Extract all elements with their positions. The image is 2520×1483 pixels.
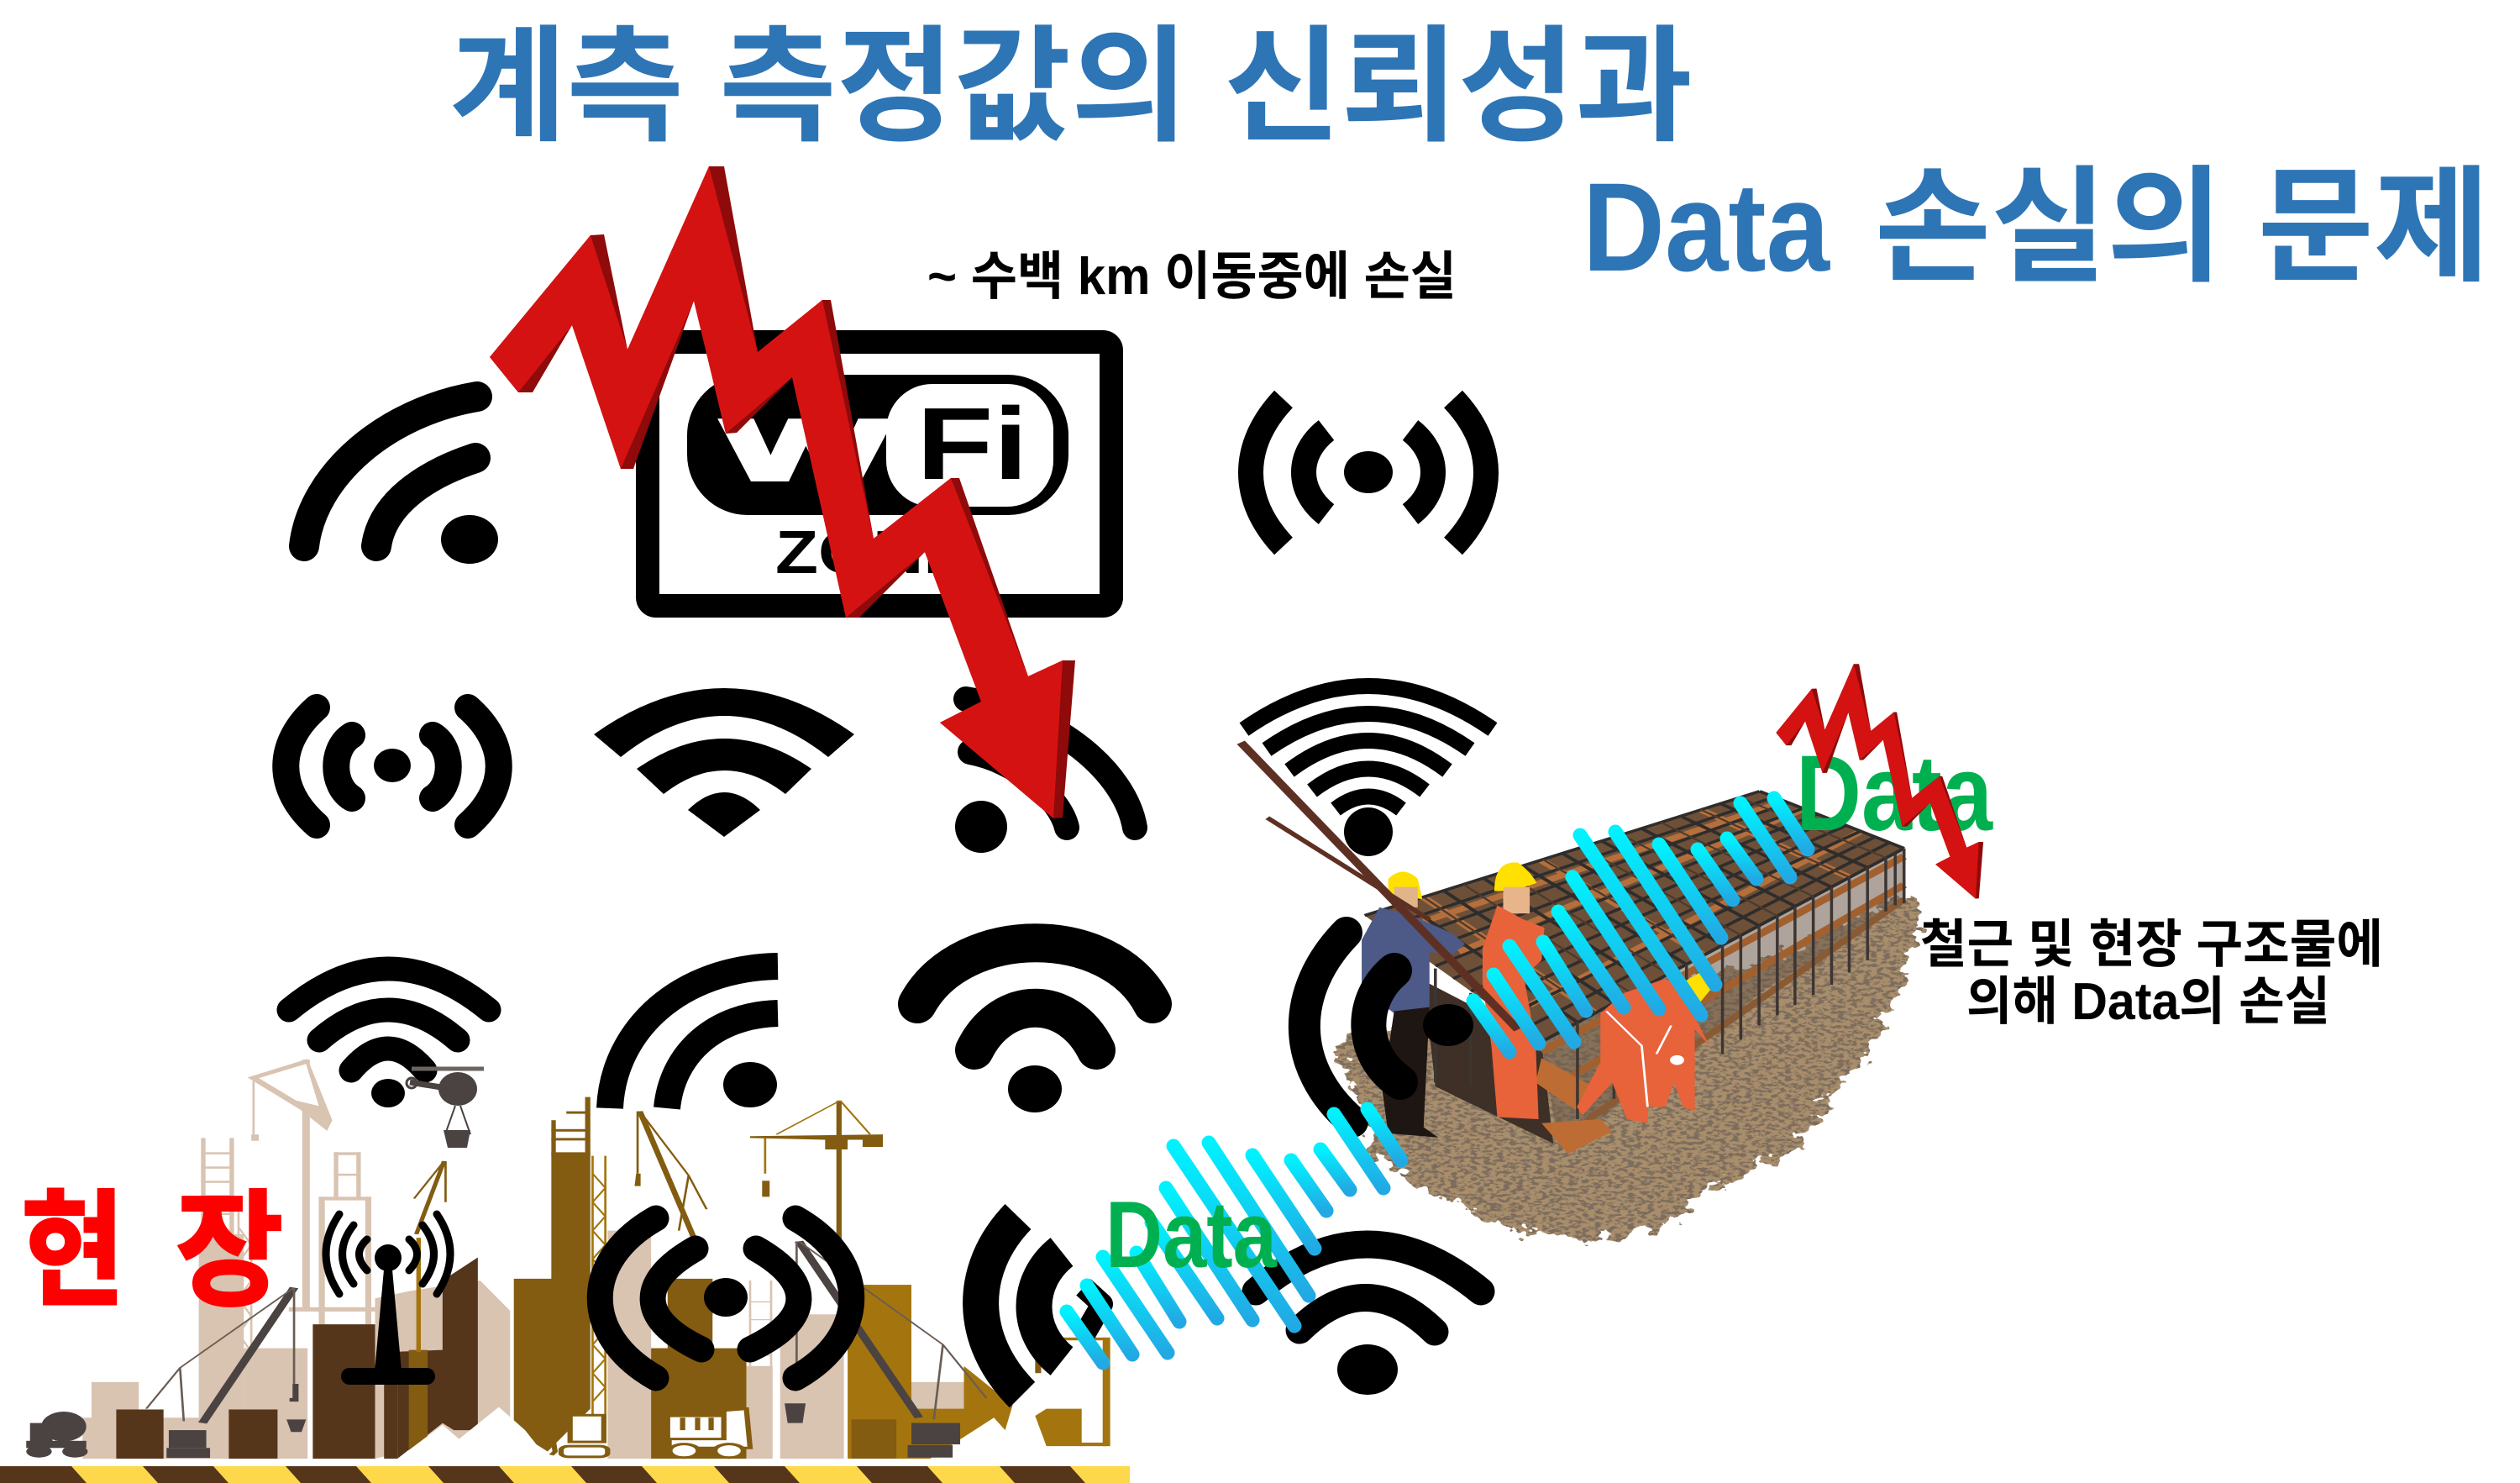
- worker in blue jacket: [1362, 871, 1465, 1138]
- wood poles: [1241, 743, 1518, 1029]
- hazard stripe band: [0, 1466, 1130, 1483]
- icon: broadcast center: [600, 1218, 852, 1378]
- label: field site: [21, 1181, 283, 1323]
- icon: broadcast arcs over site: [1305, 933, 1473, 1122]
- big red zigzag down arrow: [490, 166, 1075, 818]
- construction skyline illustration: [26, 1059, 1110, 1459]
- bulldozer: [551, 1415, 607, 1457]
- icon: wifi quarter row 2: [955, 699, 1135, 853]
- small red zigzag down arrow: [1776, 664, 1983, 899]
- cranes: [146, 1081, 986, 1423]
- icon: wifi quarter top-left: [304, 397, 498, 564]
- icon: broadcast cut left: [981, 1217, 1102, 1395]
- caption: rebar loss line 2: 의해 Data의 손실: [1966, 973, 2330, 1031]
- icon: wifi fan row 2: [594, 688, 854, 837]
- label: Data upper: Data: [1796, 734, 1993, 854]
- icon: broadcast row 2 left: [286, 707, 499, 825]
- rebar cage top: [1365, 791, 1904, 1042]
- rebar cage side layers: [1424, 849, 1904, 1154]
- mixer truck: [26, 1412, 87, 1458]
- label: Data lower: Data: [1105, 1182, 1278, 1287]
- title line 2: [1583, 156, 2490, 297]
- icon: wifi arcs row 3 left: [289, 969, 489, 1107]
- title line 2: 손실의 문제: [1875, 156, 2490, 297]
- white cutout in light crane: [259, 1064, 319, 1106]
- icon: wifi zone sign: W: [724, 403, 889, 497]
- label: field site: 현: [21, 1181, 125, 1323]
- caption: rebar loss line 1: 철근 및 현장 구조물에: [1920, 916, 2383, 974]
- icon: antenna tower: [326, 1214, 450, 1385]
- icon: broadcast top-right: [1251, 399, 1486, 546]
- worker in orange suit: [1483, 862, 1545, 1119]
- caption: loss during travel: ~ 수백 km 이동중에 손실: [927, 248, 1457, 306]
- lattice towers: [592, 1156, 606, 1416]
- icon: helicopter with basket: [407, 1069, 484, 1148]
- label: field site: 장: [176, 1181, 283, 1322]
- bending orange workers: [1577, 970, 1711, 1123]
- title line 1: 계측 측정값의 신뢰성과: [449, 16, 1693, 157]
- icon: wifi five arcs: [1244, 686, 1493, 856]
- rebar site: dirt mound: [1241, 743, 1924, 1241]
- white ground mountains: [397, 1407, 548, 1459]
- icon: wifi quarter row 3: [610, 966, 778, 1108]
- icon: wifi zone sign: [648, 342, 1111, 606]
- crawler cranes bases: [166, 1423, 960, 1458]
- hanging loads and hooks: [251, 1134, 806, 1432]
- dump truck: [668, 1409, 750, 1458]
- icon: wifi bottom: [1256, 1244, 1481, 1395]
- signal waves: to rebar site: [1473, 798, 1808, 1052]
- icon: wifi zone sign: Fi: [916, 387, 1028, 501]
- icon: wifi zone sign: ZONE: [775, 519, 970, 586]
- rebar verticals: [1436, 849, 1904, 1119]
- signal waves: from field site: [1067, 1109, 1401, 1363]
- title line 2: Data: [1583, 156, 1830, 297]
- icon: wifi bold row 3: [917, 943, 1152, 1112]
